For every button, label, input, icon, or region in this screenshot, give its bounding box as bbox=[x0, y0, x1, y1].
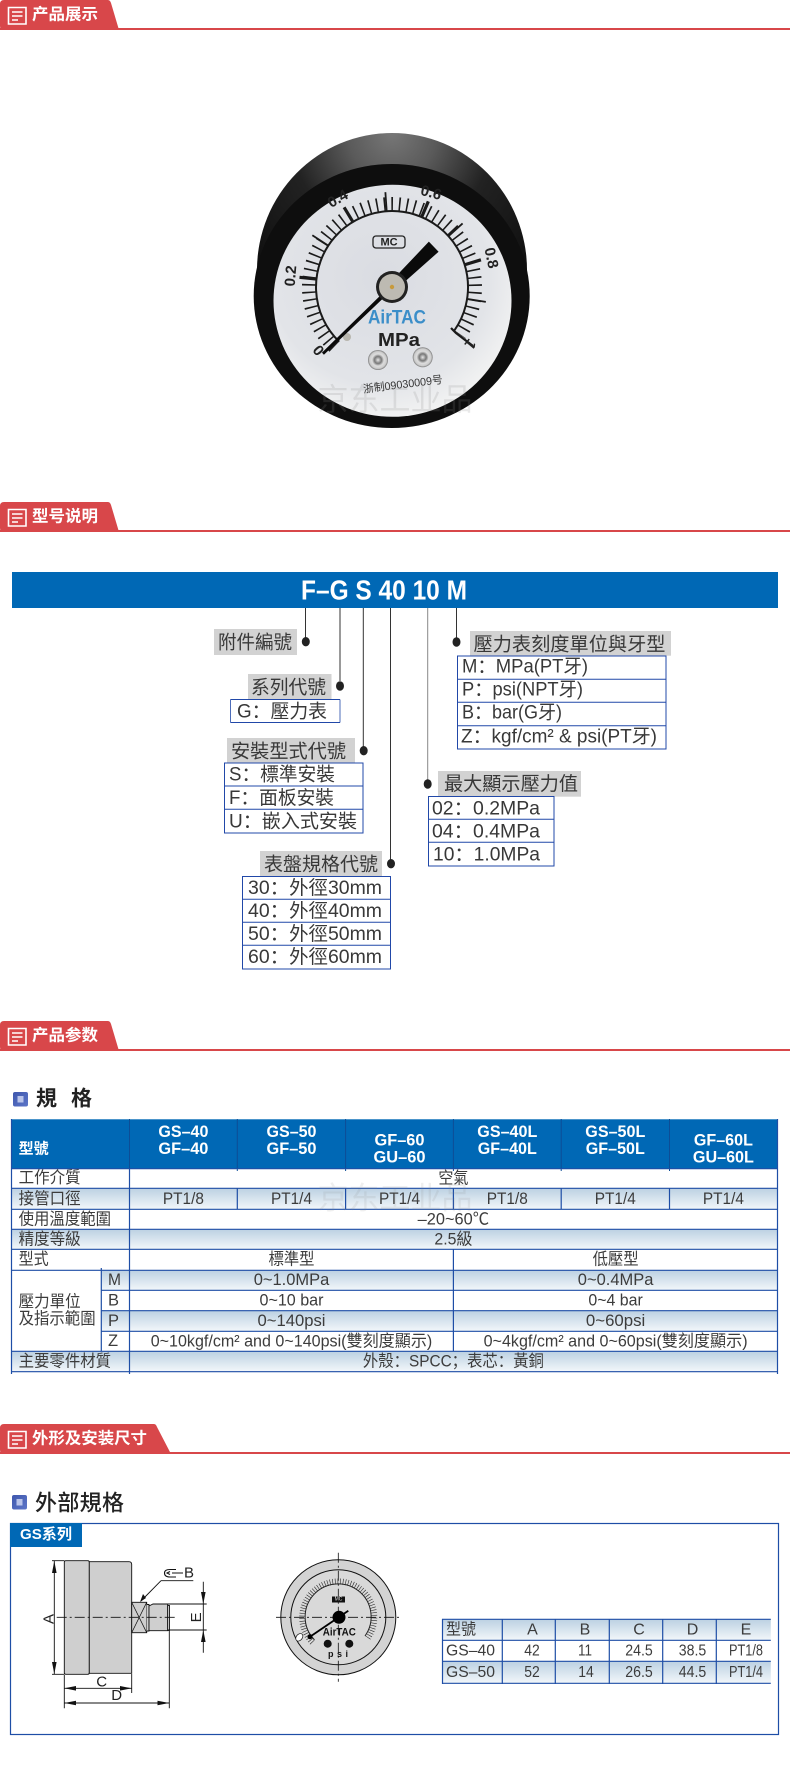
section header: 型号说明 bbox=[0, 502, 790, 532]
MC mark bbox=[373, 236, 405, 248]
product photo: pressure gauge bbox=[254, 133, 530, 428]
option group: 壓力表刻度單位與牙型: M：MPa(PT牙) bbox=[462, 656, 588, 678]
table values: PT1/4 bbox=[379, 1190, 420, 1208]
table row labels: B bbox=[108, 1292, 119, 1310]
dimension table: 型號 bbox=[446, 1620, 476, 1638]
dimension letters bbox=[40, 1564, 205, 1704]
dimension table grid bbox=[442, 1619, 771, 1684]
table values: PT1/8 bbox=[163, 1190, 204, 1208]
brand logo AirTAC: AirTAC bbox=[368, 308, 426, 328]
needle hub bbox=[376, 271, 408, 303]
table row labels: P bbox=[108, 1312, 119, 1330]
connector lines and dots bbox=[302, 608, 460, 868]
specification table bbox=[11, 1119, 778, 1374]
option group: 表盤規格代號: 50：外徑50mm bbox=[248, 923, 382, 945]
table values bbox=[151, 1168, 748, 1370]
dimension letters: E bbox=[188, 1612, 205, 1622]
gauge scale numbers: 0.6 bbox=[419, 182, 443, 204]
gauge scale numbers: 0.4 bbox=[325, 186, 352, 212]
screws bbox=[343, 333, 433, 370]
option group: 安裝型式代號: U：嵌入式安裝 bbox=[229, 810, 357, 832]
table values: 0~0.4MPa bbox=[578, 1271, 654, 1289]
table header row: GU–60 bbox=[374, 1148, 426, 1166]
section header: 型号说明: 型号说明 bbox=[32, 508, 98, 526]
table header row bbox=[11, 1119, 778, 1171]
option group: 系列代號: 系列代號 bbox=[251, 676, 326, 698]
table header row: GF–50 bbox=[266, 1139, 316, 1158]
table header row: GF–60 bbox=[374, 1130, 424, 1150]
gauge scale numbers: 0.2 bbox=[282, 265, 300, 287]
option group: 表盤規格代號: 40：外徑40mm bbox=[248, 900, 382, 922]
heading: 外部規格: 外部規格 bbox=[35, 1490, 124, 1516]
section header: 产品展示 bbox=[0, 0, 790, 30]
section header: 产品参数 bbox=[0, 1021, 790, 1051]
dimension table: C bbox=[633, 1622, 645, 1638]
dimension table shading bbox=[442, 1619, 771, 1683]
option group: 表盤規格代號 bbox=[242, 851, 390, 969]
tab: GS系列: GS系列 bbox=[20, 1525, 72, 1543]
watermark: 京东工业品 bbox=[318, 1181, 472, 1216]
dimension table: 42 bbox=[524, 1642, 540, 1660]
table values: 2.5級 bbox=[434, 1230, 472, 1248]
front view drawing: psi bbox=[328, 1649, 348, 1659]
watermark: 京东工业品 bbox=[318, 382, 472, 418]
front view drawing: MC bbox=[335, 1596, 343, 1602]
option group: 最大顯示壓力值: 04：0.4MPa bbox=[432, 822, 540, 842]
model code bar bbox=[12, 572, 778, 608]
side view drawing bbox=[52, 1561, 207, 1708]
dimension table: A bbox=[527, 1622, 538, 1638]
dimension table: D bbox=[687, 1622, 698, 1638]
gauge scale numbers bbox=[282, 182, 501, 359]
table row labels: 主要零件材質 bbox=[19, 1352, 111, 1370]
dimension table: 14 bbox=[578, 1664, 594, 1681]
dimension table: PT1/4 bbox=[729, 1664, 763, 1681]
panel: GS series bbox=[10, 1523, 778, 1734]
table header row: GU–60L bbox=[693, 1148, 754, 1166]
dimension table: 26.5 bbox=[625, 1664, 653, 1681]
table header row: GF–40 bbox=[158, 1139, 208, 1158]
table row labels: 接管口徑 bbox=[19, 1189, 81, 1208]
option group: 系列代號: G：壓力表 bbox=[237, 700, 327, 722]
table row labels bbox=[19, 1168, 121, 1370]
section header: 产品展示: 产品展示 bbox=[32, 6, 98, 24]
dimension table: 11 bbox=[578, 1642, 592, 1660]
dimension letters: C bbox=[96, 1674, 107, 1690]
dimension table: PT1/8 bbox=[729, 1642, 763, 1660]
dimension letters: B bbox=[184, 1564, 194, 1582]
table values: 0~10 bar bbox=[260, 1292, 324, 1310]
option group: 表盤規格代號: 60：外徑60mm bbox=[248, 946, 382, 968]
table header row: GS–50 bbox=[266, 1122, 316, 1141]
option group: 表盤規格代號: 表盤規格代號 bbox=[264, 854, 378, 876]
option group: 系列代號 bbox=[230, 674, 340, 722]
table values: 0~1.0MPa bbox=[254, 1271, 330, 1289]
table values: PT1/4 bbox=[703, 1190, 744, 1208]
table values: 0~10kgf/cm² and 0~140psi(雙刻度顯示) bbox=[151, 1332, 432, 1350]
option group: 安裝型式代號: S：標準安裝 bbox=[229, 764, 335, 786]
option group: 安裝型式代號: 安裝型式代號 bbox=[231, 740, 346, 762]
option group: 安裝型式代號 bbox=[224, 738, 363, 833]
table values: 外殼：SPCC；表芯：黃銅 bbox=[363, 1352, 544, 1370]
dimension arrows bbox=[52, 1561, 206, 1705]
table values: 空氣 bbox=[438, 1168, 468, 1188]
MC mark: MC bbox=[380, 236, 398, 248]
option group: 壓力表刻度單位與牙型 bbox=[458, 631, 671, 749]
option group: 表盤規格代號: 30：外徑30mm bbox=[248, 877, 382, 899]
table row labels: 工作介質 bbox=[19, 1168, 81, 1187]
dimension table: 38.5 bbox=[679, 1642, 706, 1660]
table values: 0~4 bar bbox=[588, 1292, 643, 1310]
table row labels: M bbox=[108, 1271, 121, 1289]
gauge scale numbers: 0.8 bbox=[481, 246, 501, 270]
dimension table: B bbox=[580, 1622, 590, 1638]
licence text: 浙制09030009号 bbox=[362, 373, 443, 396]
table values: 標準型 bbox=[268, 1250, 314, 1268]
unit MPa: MPa bbox=[378, 330, 421, 350]
option group: 最大顯示壓力值 bbox=[428, 771, 581, 866]
label: 附件編號: 附件編號 bbox=[218, 632, 292, 654]
option group: 壓力表刻度單位與牙型: 壓力表刻度單位與牙型 bbox=[474, 634, 666, 656]
gauge scale numbers: 1 bbox=[461, 335, 479, 353]
option group: 最大顯示壓力值: 最大顯示壓力值 bbox=[444, 773, 578, 795]
table header row: GS–40L bbox=[477, 1122, 537, 1141]
table row labels: 使用溫度範圍 bbox=[19, 1210, 111, 1228]
table row labels: 型式 bbox=[19, 1250, 49, 1268]
needle bbox=[318, 242, 439, 359]
table header row: GF–50L bbox=[586, 1139, 645, 1158]
shaded rows bbox=[11, 1188, 778, 1372]
option group: 壓力表刻度單位與牙型: B：bar(G牙) bbox=[462, 702, 562, 724]
dimension table: GS–40 bbox=[446, 1642, 495, 1660]
option group: 壓力表刻度單位與牙型: Z：kgf/cm² & psi(PT牙) bbox=[461, 726, 657, 748]
dimension letters: D bbox=[111, 1687, 122, 1704]
dimension table bbox=[442, 1619, 771, 1684]
table values: 0~140psi bbox=[258, 1312, 326, 1330]
gauge scale numbers: 0 bbox=[310, 341, 328, 359]
option group: 最大顯示壓力值: 10：1.0MPa bbox=[433, 844, 540, 866]
table header row: GS–40 bbox=[158, 1122, 208, 1141]
table row labels: Z bbox=[108, 1332, 118, 1350]
model code bar: F–G S 40 10 M bbox=[301, 574, 467, 606]
table values: PT1/8 bbox=[487, 1190, 528, 1208]
table header row: GF–60L bbox=[694, 1130, 753, 1150]
table values: 0~4kgf/cm² and 0~60psi(雙刻度顯示) bbox=[484, 1332, 748, 1350]
table row labels: 及指示範圍 bbox=[19, 1309, 96, 1328]
option group: 最大顯示壓力值: 02：0.2MPa bbox=[432, 798, 540, 820]
option group: 安裝型式代號: F：面板安裝 bbox=[229, 787, 334, 809]
tab: GS系列 bbox=[10, 1523, 82, 1547]
dimension table: 52 bbox=[524, 1664, 540, 1681]
table header row: GS–50L bbox=[585, 1122, 645, 1141]
dimension table: 44.5 bbox=[679, 1664, 706, 1681]
section header: 外形及安装尺寸 bbox=[0, 1424, 790, 1454]
gauge scale ticks bbox=[300, 192, 486, 347]
table header row: 型號 bbox=[19, 1140, 49, 1158]
table header row: GF–40L bbox=[478, 1139, 537, 1158]
front view drawing: AirTAC bbox=[323, 1626, 356, 1638]
table values: –20~60℃ bbox=[418, 1210, 489, 1228]
table values: 低壓型 bbox=[593, 1250, 639, 1268]
table values: 0~60psi bbox=[586, 1312, 645, 1330]
section header: 产品参数: 产品参数 bbox=[32, 1026, 98, 1044]
table values: PT1/4 bbox=[595, 1190, 636, 1208]
dimension table: GS–50 bbox=[446, 1664, 495, 1681]
section header: 外形及安装尺寸: 外形及安装尺寸 bbox=[32, 1428, 147, 1448]
table values: PT1/4 bbox=[271, 1190, 312, 1208]
option group: 壓力表刻度單位與牙型: P：psi(NPT牙) bbox=[462, 680, 583, 700]
table row labels: 精度等級 bbox=[19, 1230, 81, 1248]
table row labels: 壓力單位 bbox=[19, 1292, 81, 1311]
dimension letters: A bbox=[40, 1614, 58, 1624]
dimension table: 24.5 bbox=[625, 1642, 653, 1660]
heading: 規格: 規 格 bbox=[36, 1088, 92, 1110]
table grid bbox=[11, 1119, 778, 1374]
front view drawing bbox=[276, 1553, 401, 1682]
dimension table: E bbox=[741, 1622, 751, 1638]
